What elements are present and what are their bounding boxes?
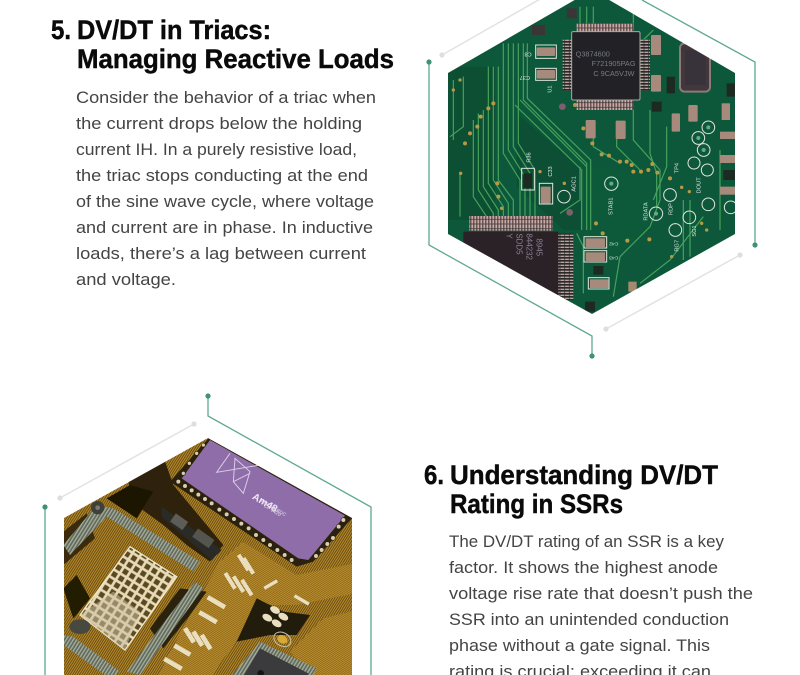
section 6 body text: factor. It shows the highest anode bbox=[449, 558, 718, 577]
small components: RDATA bbox=[643, 202, 649, 221]
section 6 body text: voltage rise rate that doesn’t push the bbox=[449, 584, 753, 603]
hexagon outline: section 5 bbox=[426, 0, 758, 359]
QFP socket bbox=[63, 501, 203, 675]
main QFP chip: F721905PAG bbox=[592, 59, 636, 68]
small components: TP4 bbox=[675, 163, 681, 173]
hexagon photo: green circuit board bbox=[440, 0, 747, 320]
section 6 body text: phase without a gate signal. This bbox=[449, 636, 710, 655]
section 6 heading: 6. bbox=[424, 460, 444, 490]
section 5 body text: Consider the behavior of a triac when bbox=[76, 88, 376, 107]
small components: RG7 bbox=[674, 240, 680, 252]
section 6 body text: The DV/DT rating of an SSR is a key bbox=[449, 532, 724, 551]
small components: R36 bbox=[526, 152, 532, 163]
section 5 heading: 5. bbox=[51, 15, 71, 45]
hexagon photo: gold circuit board bbox=[64, 438, 352, 675]
main QFP chip: C 9CA5VJW bbox=[593, 69, 635, 78]
small components: STAB1 bbox=[609, 197, 615, 215]
purple AMD chip: AM2964BDC bbox=[259, 498, 287, 519]
jumper connector bbox=[162, 507, 222, 560]
small components bbox=[520, 8, 737, 312]
section 5 body text: the triac stops conducting at the end bbox=[76, 166, 368, 185]
section 5 body text: current IH. In a purely resistive load, bbox=[76, 140, 357, 159]
lower left chip: 8945 bbox=[535, 238, 544, 257]
main QFP chip: Q3874600 bbox=[576, 50, 610, 59]
section 5 body text: of the sine wave cycle, where voltage bbox=[76, 192, 374, 211]
section 6 body text bbox=[449, 532, 753, 675]
lower left chip: 844232 bbox=[525, 233, 534, 261]
section 6 heading: Understanding DV/DT bbox=[450, 460, 718, 490]
section 5 heading: Managing Reactive Loads bbox=[77, 44, 394, 74]
gold trace bands bbox=[63, 513, 363, 675]
small components: AGC1 bbox=[571, 176, 577, 192]
board pads and parts bbox=[163, 554, 317, 675]
small components: RDP bbox=[669, 203, 675, 215]
lower left chip bbox=[463, 216, 573, 303]
section 5 body text bbox=[76, 88, 376, 289]
section 5 body text: and current are in phase. In inductive bbox=[76, 218, 373, 237]
small components: C37 bbox=[520, 74, 530, 80]
purple AMD chip: CF 9420 bbox=[262, 503, 282, 518]
small components: C43 bbox=[609, 255, 618, 261]
small components: U1 bbox=[548, 85, 554, 93]
lower left chip: Y bbox=[505, 233, 514, 239]
crystal bbox=[680, 43, 710, 92]
lower left chip: SDD5 bbox=[515, 233, 524, 255]
purple AMD chip: Am48 bbox=[250, 491, 279, 515]
section 6 heading: Rating in SSRs bbox=[450, 489, 623, 519]
section 5 body text: and voltage. bbox=[76, 270, 176, 289]
small components: C33 bbox=[548, 166, 554, 177]
small components: C8 bbox=[524, 51, 532, 57]
hexagon outline: section 6 bbox=[42, 393, 371, 675]
main QFP chip bbox=[563, 23, 650, 110]
section 5 heading bbox=[51, 15, 394, 74]
section 5 body text: loads, there’s a lag between current bbox=[76, 244, 366, 263]
section 5 body text: the current drops below the holding bbox=[76, 114, 362, 133]
section 6 body text: SSR into an unintended conduction bbox=[449, 610, 729, 629]
small components: SG1 bbox=[692, 225, 698, 237]
small components: C42 bbox=[609, 241, 618, 247]
section 5 heading: DV/DT in Triacs: bbox=[77, 15, 271, 45]
small components: DOUT bbox=[697, 177, 703, 193]
section 6 heading bbox=[424, 460, 718, 519]
purple AMD chip bbox=[170, 438, 353, 567]
